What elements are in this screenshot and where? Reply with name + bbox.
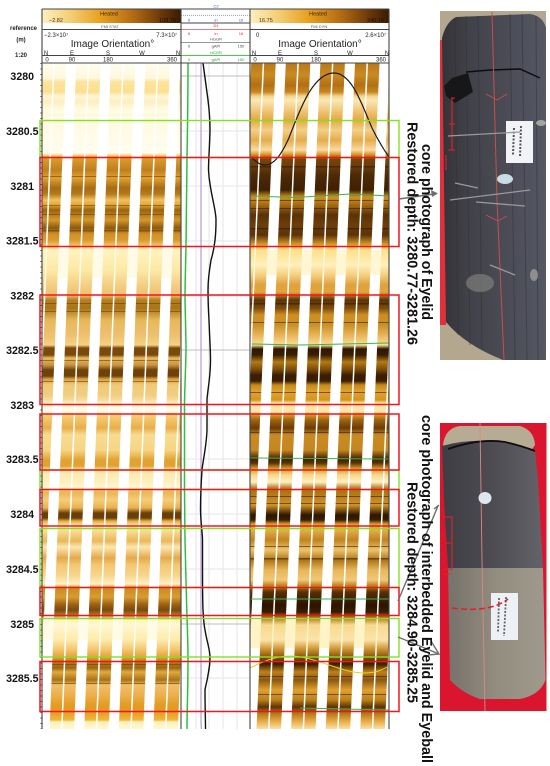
FMI STAT header: 360 — [167, 58, 178, 64]
scale heading — [10, 26, 38, 59]
depth labels: 3284 — [10, 509, 34, 521]
FMI STAT header: 7.3×10⁷ — [156, 32, 177, 39]
depth labels: 3280.5 — [6, 126, 39, 138]
arrows to lower core photograph — [398, 505, 439, 655]
FMI DYN header: 2.6×10⁷ — [365, 32, 386, 39]
caption: upper core photograph: core photograph of Eyelid — [418, 144, 434, 320]
label — [491, 593, 518, 640]
depth labels: 3285.5 — [6, 673, 39, 685]
green gamma curve — [184, 63, 188, 729]
curve track header: 6 — [188, 18, 191, 22]
curve track header: 16 — [239, 31, 244, 36]
bedding lines, green — [251, 194, 389, 710]
FMI DYN header: N — [385, 51, 389, 57]
depth labels: 3283 — [10, 400, 34, 412]
depth labels — [6, 71, 39, 685]
crack — [448, 441, 535, 451]
depth labels: 3284.5 — [6, 564, 39, 576]
FMI DYN header: N — [252, 51, 256, 57]
FMI STAT header: W — [139, 51, 145, 57]
FMI STAT header: S — [106, 51, 110, 57]
scale heading: (m) — [16, 38, 26, 44]
black caliper curve — [200, 63, 216, 729]
FMI STAT header: FMI STAT — [101, 24, 119, 29]
dark broken patch — [444, 73, 473, 103]
curve track header: 16 — [239, 18, 244, 22]
curve track header: 150 — [238, 44, 245, 48]
curve track header: HCGR — [210, 50, 222, 55]
panel frame lines — [42, 9, 389, 729]
depth labels: 3282 — [10, 290, 34, 302]
core photograph: Eyelid — [440, 11, 546, 360]
FMI DYN header: W — [347, 51, 353, 57]
FMI STAT header: 108.75 — [159, 18, 176, 24]
panel: FMI DYN image log — [250, 9, 389, 729]
tan cap — [443, 426, 535, 452]
scale bar — [446, 98, 455, 170]
orientation line — [480, 423, 485, 711]
FMI DYN header: E — [278, 51, 282, 57]
caption: lower core photograph: Restored depth: 3284.90-3285.25 — [404, 482, 420, 703]
purple curve — [200, 63, 202, 729]
FMI STAT header: −2.3×10⁷ — [44, 32, 68, 39]
sticker — [497, 174, 513, 184]
FMI STAT header: 90 — [69, 58, 76, 64]
FMI DYN pads — [250, 63, 389, 729]
curve track header: gAPI — [212, 44, 220, 48]
caption: lower core photograph: core photograph of interbedded Eyelid and Eyeball — [418, 415, 434, 763]
depth labels: 3282.5 — [6, 345, 39, 357]
caption: upper core photograph: Restored depth: 3280.77-3281.26 — [404, 122, 420, 345]
curve track header: HGGR — [210, 36, 222, 42]
FMI STAT header: N — [176, 51, 180, 57]
FMI DYN header: 0 — [253, 58, 257, 64]
core surface striations — [455, 14, 538, 360]
arrow to upper core photograph — [399, 190, 438, 199]
FMI DYN header: Image Orientation° — [278, 39, 362, 50]
FMI DYN header: Heated — [309, 12, 327, 18]
pale streaks — [448, 132, 530, 275]
scale heading: 1:20 — [15, 53, 28, 59]
scale heading: reference — [10, 26, 38, 32]
FMI DYN header: 240.16 — [367, 18, 384, 24]
FMI DYN header: S — [314, 51, 318, 57]
sticker — [478, 492, 492, 504]
red highlight boxes — [40, 158, 399, 712]
FMI DYN header: 16.75 — [259, 18, 273, 24]
FMI STAT header: 0 — [45, 58, 49, 64]
FMI STAT header: E — [70, 51, 74, 57]
fracture sine curve, black — [251, 73, 389, 165]
curve track header: D1 — [213, 23, 219, 28]
orientation line — [492, 12, 504, 360]
FMI STAT header: N — [44, 51, 48, 57]
panel: resistivity and gamma curve track — [181, 4, 250, 729]
FMI STAT header: −2.82 — [49, 18, 63, 24]
FMI DYN header: 180 — [311, 58, 322, 64]
curve track header: C2 — [213, 4, 219, 8]
label — [506, 121, 533, 163]
depth labels: 3280 — [10, 71, 34, 83]
curve track header — [181, 4, 250, 62]
core photograph: interbedded Eyelid and Eyeball — [440, 423, 546, 711]
depth labels: 3281 — [10, 181, 34, 193]
scale bracket — [443, 517, 452, 574]
panel: FMI STAT image log — [42, 9, 181, 729]
crack — [466, 69, 540, 78]
depth labels: 3283.5 — [6, 454, 39, 466]
FMI STAT header: Image Orientation° — [71, 39, 154, 50]
curve track header: gAPI — [212, 57, 220, 62]
curve track header: 6 — [188, 31, 191, 36]
curve track header: 0 — [188, 57, 191, 62]
FMI DYN header: 90 — [277, 58, 284, 64]
contact dashed line — [452, 599, 508, 609]
curve track header: in — [214, 31, 218, 36]
caption: upper core photograph — [404, 122, 434, 345]
dark section — [442, 441, 543, 568]
curve track header: 150 — [238, 57, 245, 62]
FMI STAT pads — [42, 63, 181, 729]
green highlight boxes — [40, 120, 399, 657]
FMI STAT header: Heated — [100, 12, 118, 18]
FMI DYN header: 360 — [376, 58, 387, 64]
FMI DYN header: 0 — [256, 33, 260, 39]
FMI DYN header — [250, 9, 389, 64]
fracture sine curve, yellow — [250, 656, 389, 673]
depth scale — [6, 26, 42, 729]
depth labels: 3285 — [10, 619, 34, 631]
FMI STAT header — [42, 9, 181, 64]
curve track header: in — [214, 18, 218, 22]
depth labels: 3281.5 — [6, 236, 39, 248]
curve track header: 0 — [188, 44, 191, 48]
pale section — [448, 568, 546, 699]
FMI STAT header: 180 — [103, 58, 114, 64]
FMI DYN header: FMI DYN — [311, 24, 327, 29]
caption: lower core photograph — [404, 415, 434, 763]
